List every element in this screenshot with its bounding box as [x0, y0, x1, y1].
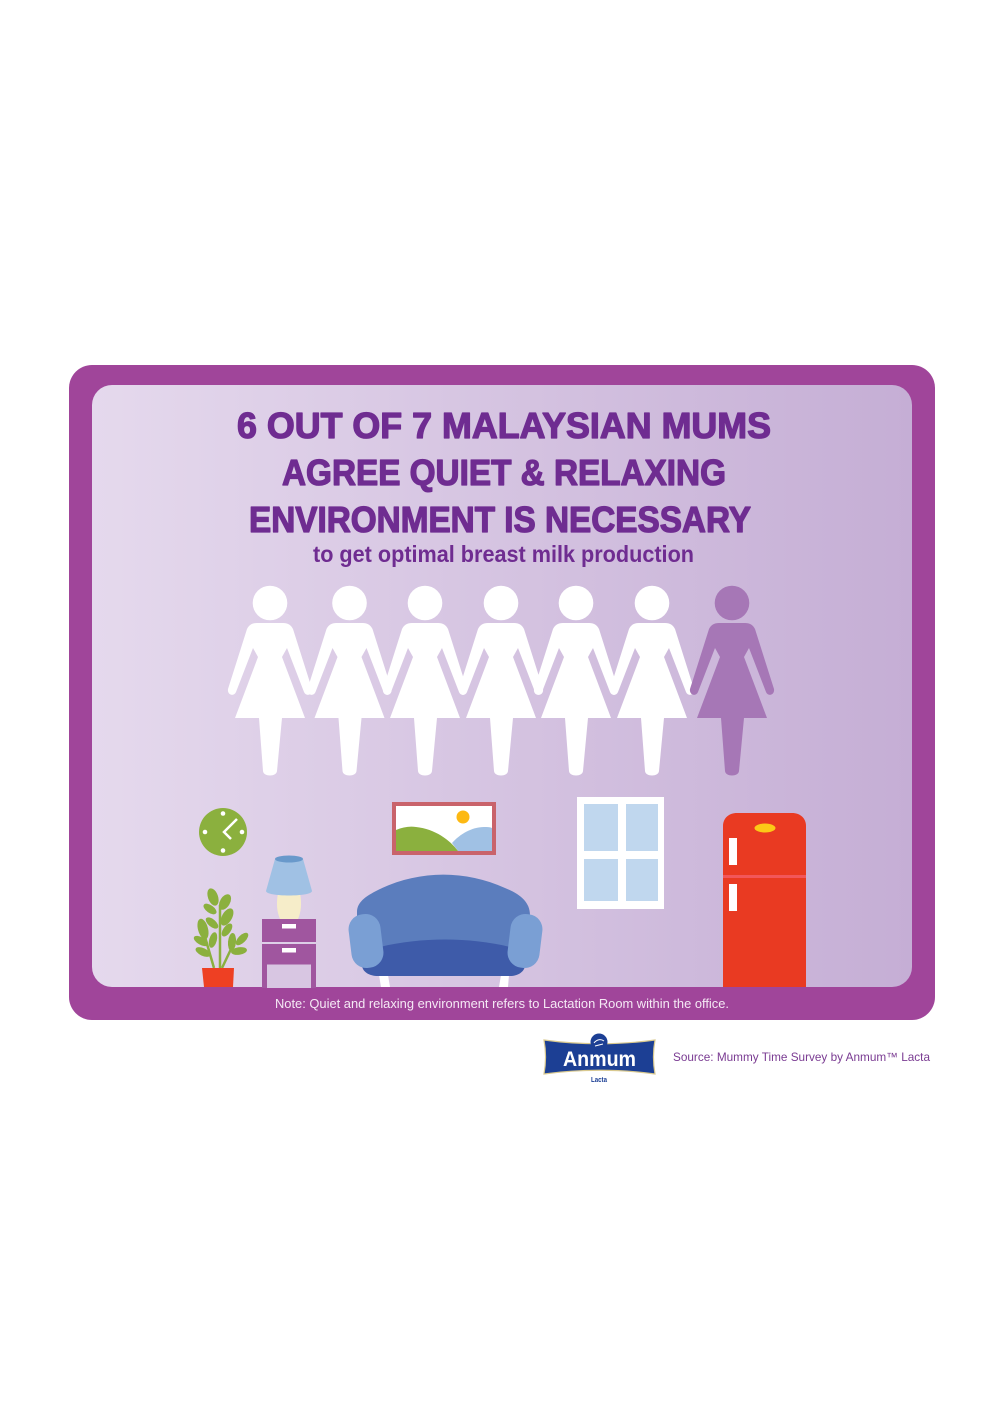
logo: Anmum Lacta: Lacta: [591, 1077, 607, 1084]
woman 4: [459, 586, 543, 776]
icon: framed picture: [392, 802, 496, 855]
logo: Anmum Lacta: Anmum: [563, 1048, 636, 1071]
icon: window: [577, 797, 664, 909]
panel: room background: [92, 385, 912, 987]
title: [237, 405, 771, 540]
icon: bedside drawers: [262, 919, 316, 988]
woman 2: [307, 586, 392, 776]
footnote: Note: Quiet and relaxing environment refers to Lactation Room within the office.: [275, 997, 729, 1011]
title: AGREE QUIET & RELAXING: [282, 452, 726, 493]
woman 6: [610, 586, 694, 776]
woman 7 highlighted: [690, 586, 774, 776]
woman 5: [534, 586, 618, 776]
icon: potted plant: [192, 887, 250, 987]
woman 3: [383, 586, 467, 776]
icon: wall clock: [199, 808, 247, 856]
title: ENVIRONMENT IS NECESSARY: [249, 499, 751, 540]
pictogram: six of seven women: [228, 586, 774, 776]
panel: purple frame: [69, 365, 935, 1020]
subtitle: to get optimal breast milk production: [313, 541, 694, 567]
title: 6 OUT OF 7 MALAYSIAN MUMS: [237, 405, 771, 446]
icon: refrigerator: [723, 813, 806, 987]
woman 1: [228, 586, 312, 776]
source note: Source: Mummy Time Survey by Anmum™ Lacta: [673, 1050, 930, 1064]
logo: Anmum Lacta: [544, 1034, 655, 1084]
icon: table lamp: [266, 856, 312, 919]
icon: sofa: [347, 875, 544, 987]
